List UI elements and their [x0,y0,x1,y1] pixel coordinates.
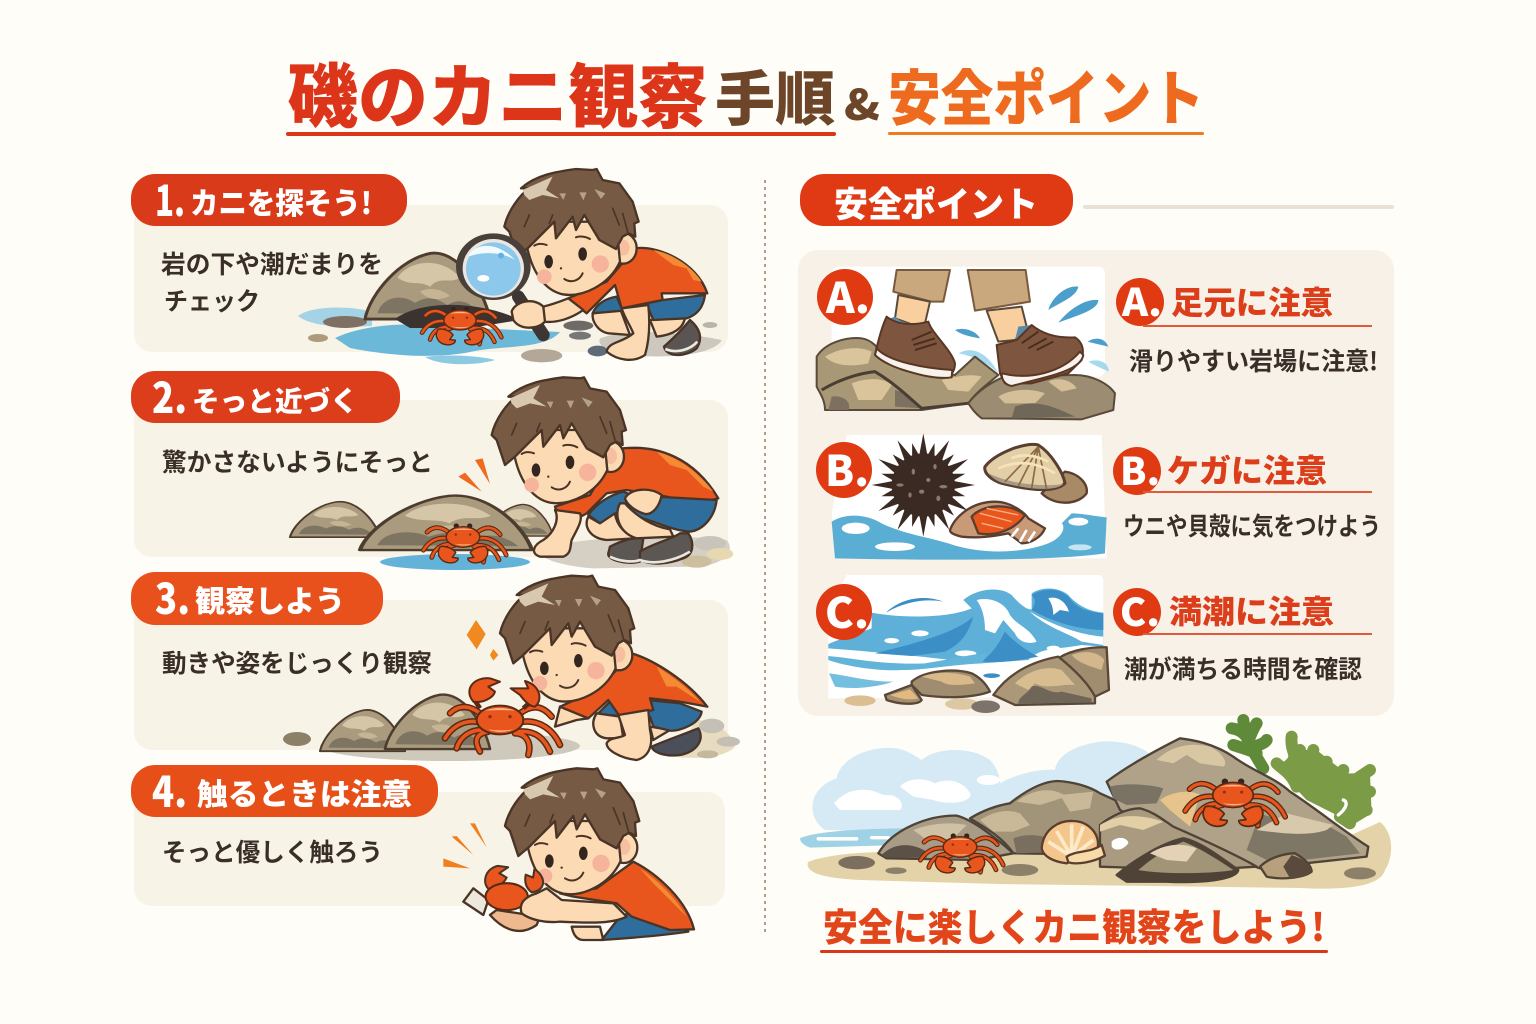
step 2 illustration: boy approaching crab [290,377,733,570]
safety points heading: 安全ポイント [834,177,1038,228]
step 3 illustration: boy observing crab [283,576,740,761]
point B marker: B. [825,438,869,499]
point B text: ウニや貝殻に気をつけよう [1123,507,1381,543]
point A heading: 足元に注意 [1171,278,1333,324]
step 1 panel [131,168,728,364]
point B heading [1113,441,1372,496]
step 1 text: 岩の下や潮だまりを [161,245,383,281]
step 3 text: 動きや姿をじっくり観察 [162,644,432,680]
title: 安全ポイント [888,51,1204,138]
step 1 badge [131,168,407,229]
step 1 illustration: boy with magnifier, crab under rock [298,169,722,364]
point C heading [1113,582,1372,637]
bottom illustration: rocky shore with crabs [800,720,1391,889]
step 2 badge [131,365,400,426]
step 2 panel [131,365,733,570]
step 2 text: 驚かさないようにそっと [162,443,433,479]
step 1 badge: カニを探そう! [190,179,372,223]
point A illustration: boots on slippery rocks [817,267,1115,419]
step 2 badge: 2. [152,365,187,426]
title: & [844,72,880,133]
point B illustration: sea urchin and shells [832,433,1107,560]
point C heading: 満潮に注意 [1169,587,1334,633]
point A text: 滑りやすい岩場に注意! [1129,342,1378,378]
point C text: 潮が満ちる時間を確認 [1124,650,1362,686]
panel: safety points [798,250,1394,716]
step 2 badge: そっと近づく [192,380,358,420]
step 4 badge: 4. [152,759,187,820]
step 3 panel [131,566,740,761]
step 3 badge: 観察しよう [195,577,345,621]
step 4 badge: 触るときは注意 [197,770,412,814]
point A heading: A. [1121,272,1162,327]
title [286,42,1204,143]
title: 手順 [715,52,835,137]
step 4 panel [131,759,725,940]
point C marker: C. [825,580,869,641]
point B heading: B. [1120,441,1160,496]
closing message: 安全に楽しくカニ観察をしよう! [823,897,1325,952]
step 4 badge [131,759,438,820]
step 4 illustration: boy holding crab [443,768,694,940]
point A heading [1116,272,1372,327]
point C heading: C. [1120,582,1160,637]
step 4 text: そっと優しく触ろう [162,833,383,869]
point B heading: ケガに注意 [1167,446,1327,492]
step 3 badge: 3. [155,566,190,627]
step 1 badge: 1. [155,168,185,229]
point C illustration: high tide waves and rocks [828,575,1109,713]
step 3 badge [131,566,383,627]
point A marker: A. [825,265,870,326]
safety points heading [800,174,1394,228]
step 1 text: チェック [164,282,260,318]
step 1 text [161,245,383,318]
title: 磯のカニ観察 [288,42,708,143]
